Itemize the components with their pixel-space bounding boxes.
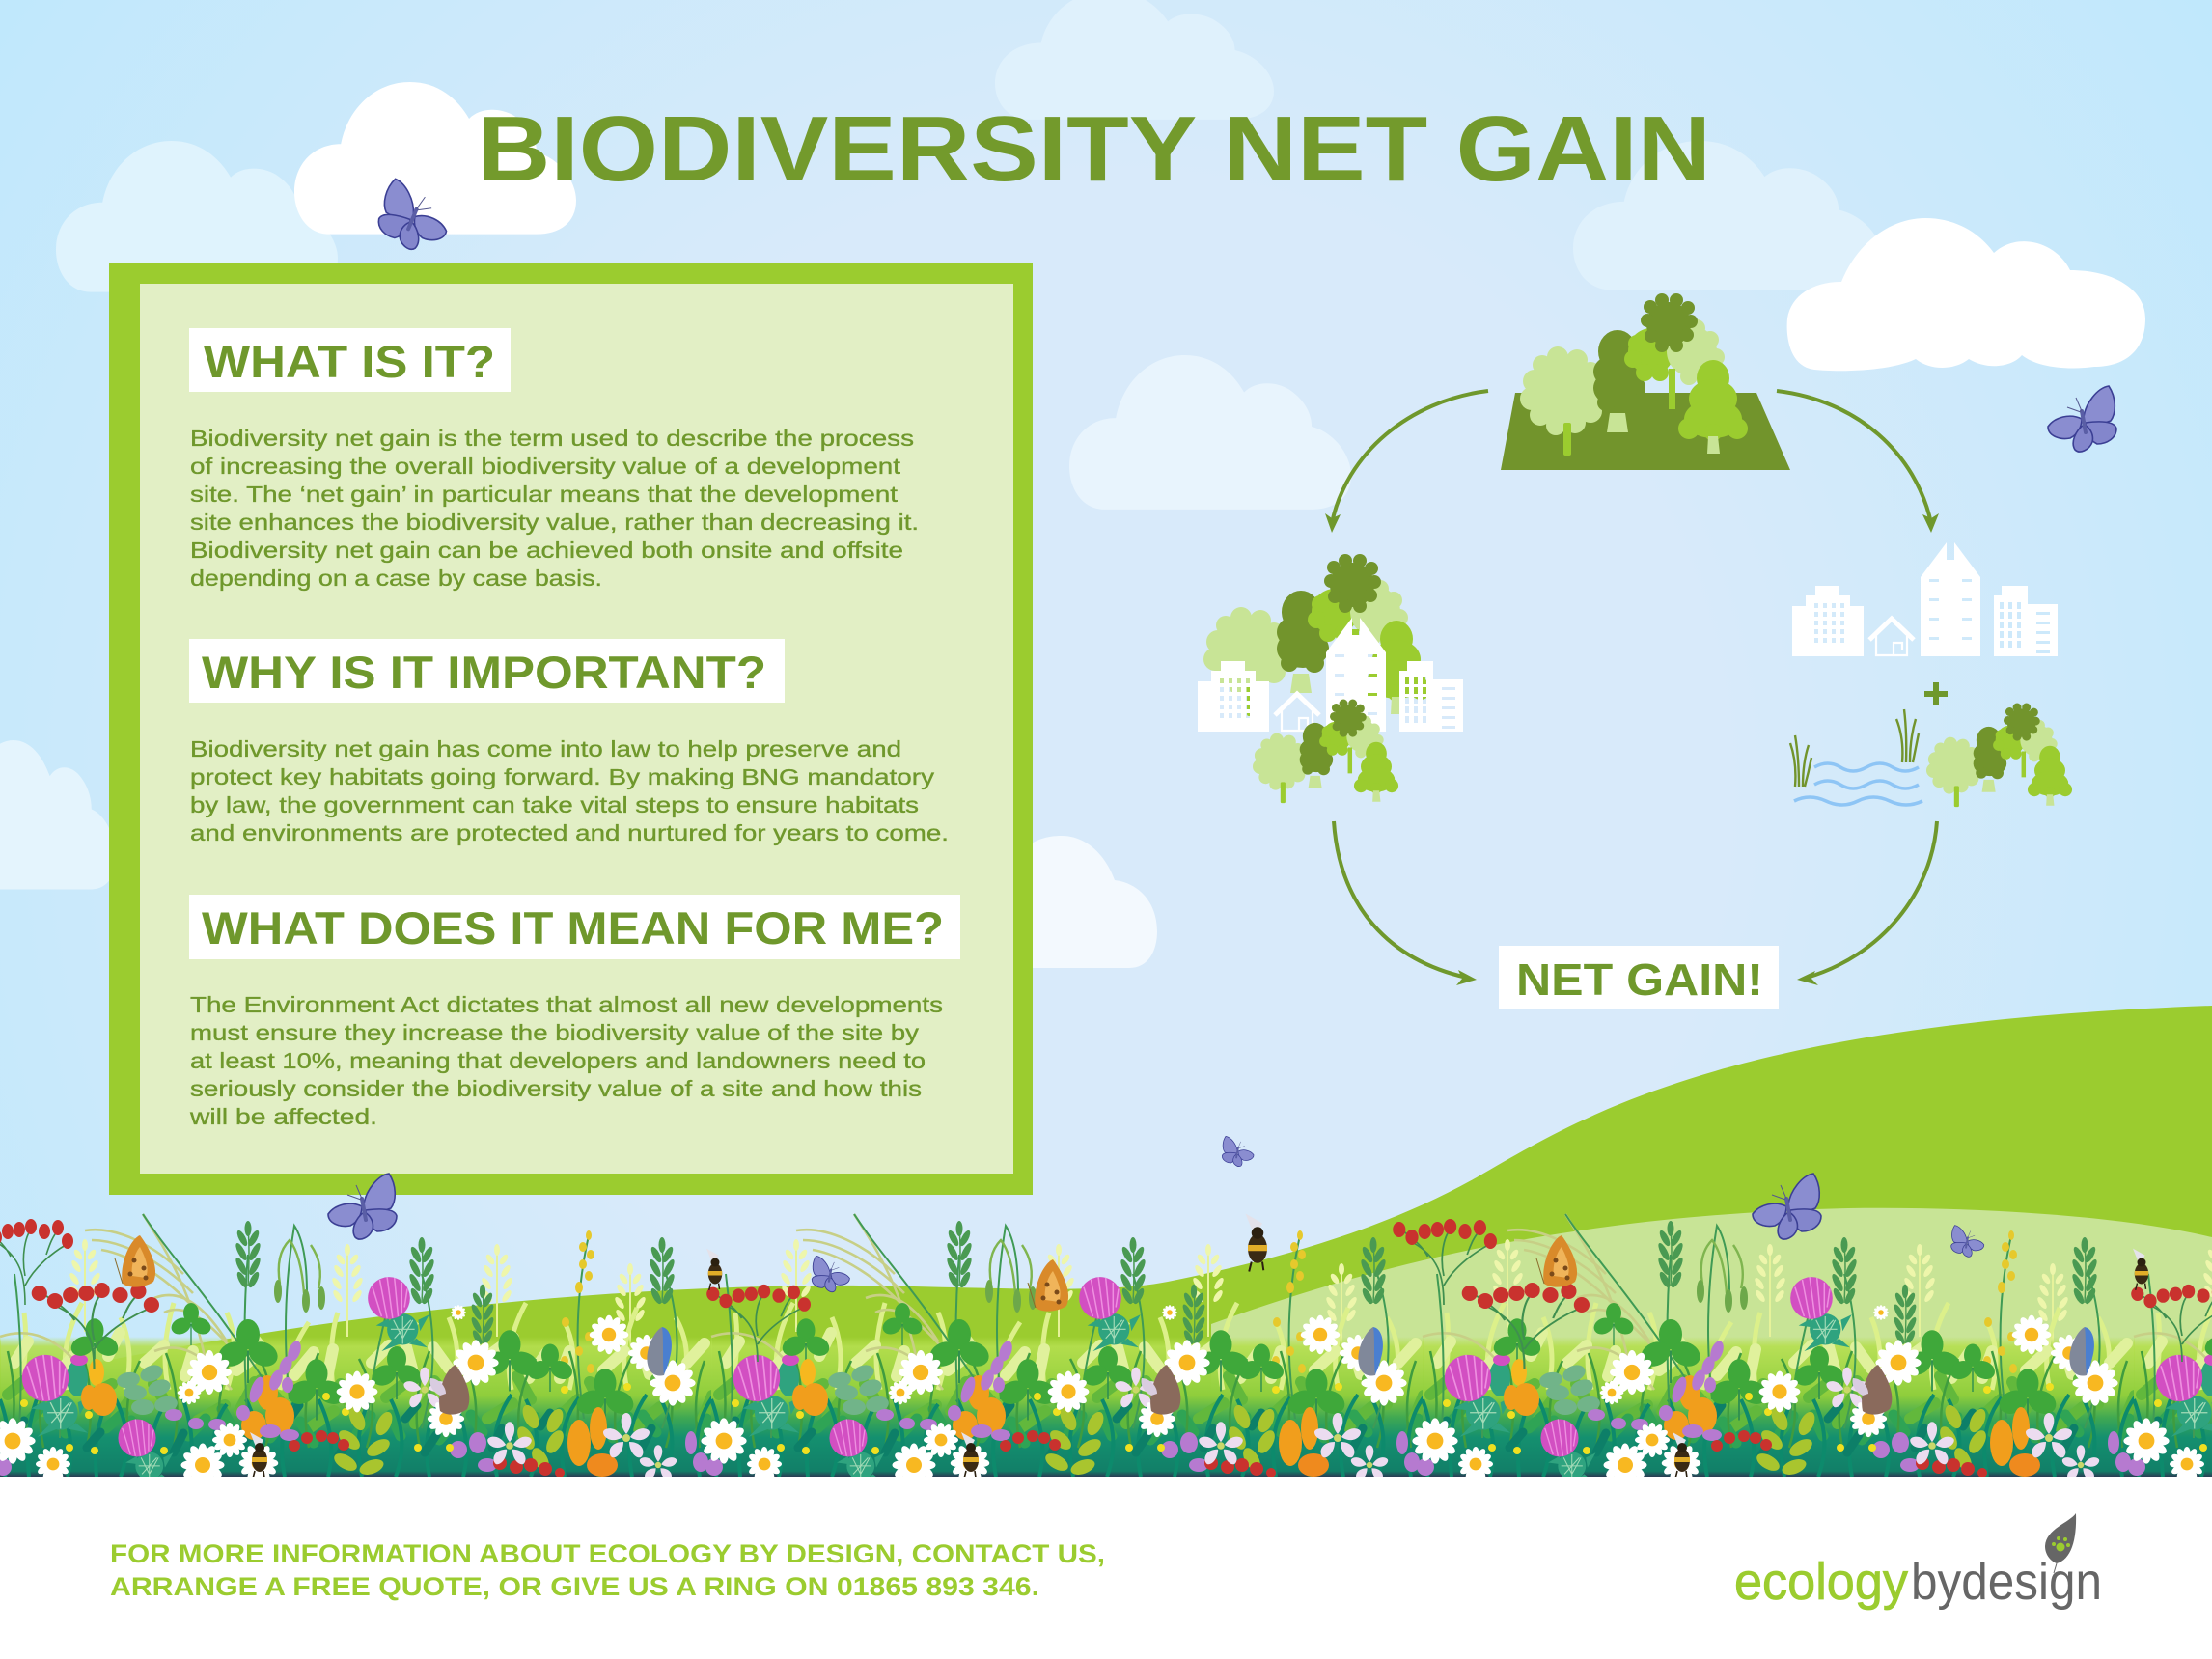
meadow border — [0, 1214, 2212, 1486]
text block: what is it: depending on a case by case basis. — [190, 566, 602, 591]
diagram: offsite habitat with water and trees — [1790, 704, 2072, 807]
heading: what is it: WHAT IS IT? — [204, 336, 495, 387]
text block: what does it mean for me: The Environment Act dictates that almost all new developments — [190, 992, 943, 1017]
text block: what is it: of increasing the overall biodiversity value of a development — [190, 454, 901, 479]
icon: orange butterfly left — [115, 1235, 155, 1287]
icon: bee — [706, 1249, 722, 1290]
footer — [0, 1477, 2212, 1659]
icon: large butterfly on hill — [1753, 1174, 1821, 1239]
diagram: site with trees — [1501, 293, 1790, 470]
text block: why is it important: and environments are protected and nurtured for years to come. — [190, 820, 949, 845]
icon: large butterfly over panel bottom — [328, 1174, 397, 1239]
icon: orange butterfly middle — [1028, 1259, 1068, 1312]
clouds — [0, 0, 2145, 968]
title: BIODIVERSITY NET GAIN — [477, 97, 1711, 201]
text block: why is it important — [190, 736, 949, 845]
text block: why is it important: by law, the government can take vital steps to ensure habitats — [190, 792, 919, 817]
footer contact text — [110, 1539, 1105, 1601]
text block: what does it mean for me — [189, 992, 943, 1129]
icon: large butterfly right — [2048, 386, 2116, 452]
text block: what does it mean for me: will be affected. — [189, 1104, 377, 1129]
heading: what does it mean for me: WHAT DOES IT MEAN FOR ME? — [202, 902, 944, 954]
arrow: offsite to net gain — [1797, 821, 1937, 985]
text block: what is it: Biodiversity net gain can be achieved both onsite and offsite — [190, 538, 903, 563]
icon: large butterfly over panel top — [374, 178, 455, 256]
butterflies and bees — [115, 178, 2148, 1312]
heading: why is it important: WHY IS IT IMPORTANT? — [202, 647, 766, 698]
text block: what does it mean for me: must ensure they increase the biodiversity value of the site by — [190, 1020, 920, 1045]
plus sign — [1924, 682, 1948, 705]
diagram: onsite trees and city — [1198, 554, 1463, 803]
red flower clusters — [0, 1219, 2212, 1369]
arrow: site to onsite — [1325, 391, 1488, 533]
text block: what does it mean for me: at least 10%, meaning that developers and landowners need to — [190, 1048, 926, 1073]
diagram: offsite city — [1792, 542, 2058, 656]
footer contact text: ARRANGE A FREE QUOTE, OR GIVE US A RING ON 01865 893 346. — [110, 1572, 1039, 1601]
icon: small butterfly mid — [1222, 1136, 1254, 1167]
net gain label — [1499, 946, 1779, 1009]
icon: bee right — [2133, 1249, 2148, 1290]
text block: what is it: site enhances the biodiversity value, rather than decreasing it. — [190, 510, 919, 535]
text block: what is it — [190, 426, 919, 591]
logo: bydesign — [1911, 1553, 2102, 1611]
icon: small butterfly meadow — [812, 1256, 849, 1292]
footer contact text: FOR MORE INFORMATION ABOUT ECOLOGY BY DESIGN, CONTACT US, — [110, 1539, 1105, 1568]
text block: why is it important: Biodiversity net gain has come into law to help preserve and — [190, 736, 901, 761]
net gain label: NET GAIN! — [1516, 954, 1763, 1005]
arrow: site to offsite — [1777, 391, 1939, 533]
icon: bee large — [1245, 1214, 1267, 1272]
icon: orange butterfly right — [1536, 1235, 1577, 1287]
text block: what is it: site. The ‘net gain’ in particular means that the development — [190, 482, 899, 507]
arrow: onsite to net gain — [1334, 821, 1477, 985]
text block: what does it mean for me: seriously consider the biodiversity value of a site and how this — [190, 1076, 922, 1101]
hills — [58, 1006, 2212, 1477]
logo — [1734, 1513, 2102, 1611]
logo: ecology — [1734, 1553, 1908, 1611]
text block: why is it important: protect key habitats going forward. By making BNG mandatory — [190, 764, 935, 789]
heading: what is it — [189, 328, 511, 392]
panel: text content — [109, 263, 1033, 1195]
text block: what is it: Biodiversity net gain is the term used to describe the process — [190, 426, 914, 451]
icon: small butterfly hill — [1951, 1226, 1984, 1257]
